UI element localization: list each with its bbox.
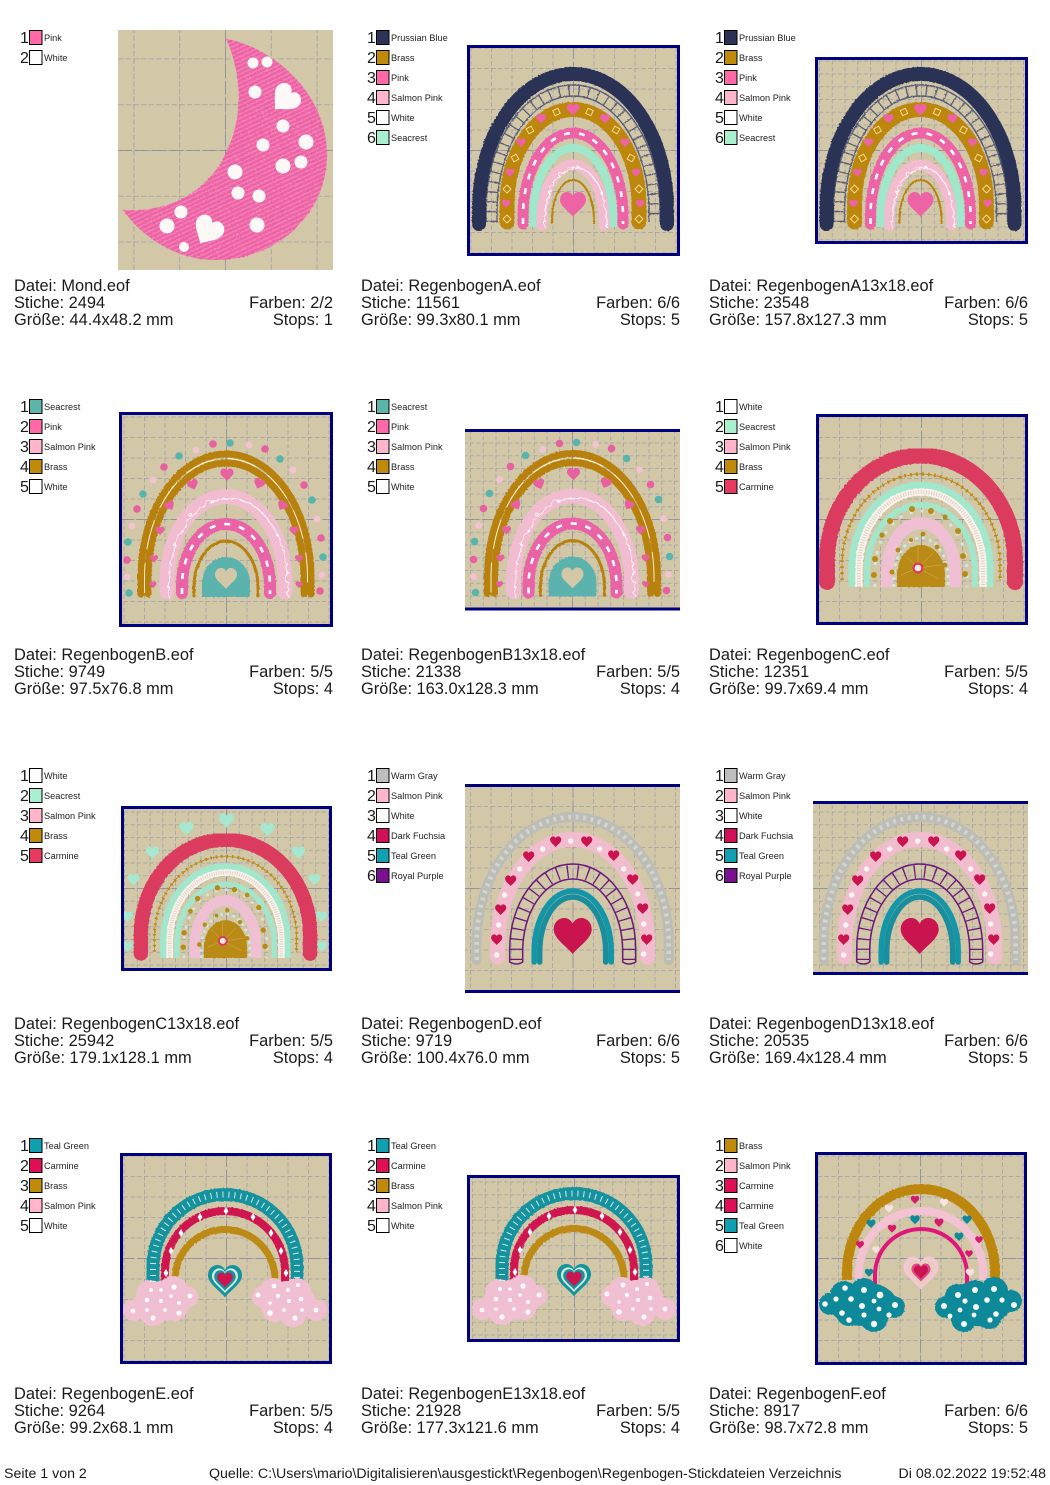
- legend: RegenbogenA colours: 3: [367, 70, 376, 87]
- legend: RegenbogenD13x18 colours: 1: [715, 768, 724, 785]
- legend: RegenbogenE13x18 colours: 5: [367, 1218, 376, 1235]
- legend: RegenbogenA13x18 colours: 6: [715, 130, 724, 147]
- file info: Mond: Größe: 44.4x48.2 mm: [14, 311, 173, 329]
- legend: RegenbogenE colours: 1: [20, 1138, 29, 1155]
- legend: RegenbogenA colours: 4: [367, 90, 376, 107]
- legend: RegenbogenC colours: 5: [715, 479, 724, 496]
- legend: RegenbogenD13x18 colours: Warm Gray: [739, 771, 786, 781]
- legend: RegenbogenA13x18 colours: 1: [715, 30, 724, 47]
- legend: RegenbogenA13x18 colours: Brass: [739, 53, 763, 63]
- legend: RegenbogenD colours: 4: [367, 828, 376, 845]
- legend: RegenbogenA colours: Seacrest: [391, 133, 428, 143]
- file info: RegenbogenB: Datei: RegenbogenB.eof: [14, 646, 194, 664]
- legend: RegenbogenB13x18 colours: [367, 399, 443, 496]
- embroidery preview: rainbow C 13x18: [121, 806, 332, 971]
- legend: RegenbogenD colours: White: [391, 811, 414, 821]
- legend: RegenbogenB13x18 colours: 1: [367, 399, 376, 416]
- file info: RegenbogenE13x18: Datei: RegenbogenE13x18.eof: [361, 1385, 586, 1403]
- embroidery preview: moon: [118, 30, 333, 270]
- file info: RegenbogenE: Stiche: 9264: [14, 1402, 105, 1420]
- panel: RegenbogenA13x18: [709, 30, 1028, 329]
- panel: Mond: [14, 30, 333, 329]
- legend: RegenbogenC13x18 colours: Salmon Pink: [44, 811, 96, 821]
- file info: RegenbogenD: Stops: 5: [620, 1049, 680, 1067]
- legend: RegenbogenD13x18 colours: 6: [715, 868, 724, 885]
- file info: RegenbogenA13x18: Größe: 157.8x127.3 mm: [709, 311, 887, 329]
- file info: RegenbogenA: Datei: RegenbogenA.eof: [361, 277, 541, 295]
- legend: RegenbogenE colours: Brass: [44, 1181, 68, 1191]
- legend: RegenbogenC colours: Salmon Pink: [739, 442, 791, 452]
- legend: RegenbogenD13x18 colours: Teal Green: [739, 851, 784, 861]
- file info: RegenbogenB13x18: Farben: 5/5: [596, 663, 680, 681]
- legend: RegenbogenE13x18 colours: Salmon Pink: [391, 1201, 443, 1211]
- legend: RegenbogenE13x18 colours: 4: [367, 1198, 376, 1215]
- legend: RegenbogenA13x18 colours: Seacrest: [739, 133, 776, 143]
- embroidery preview: rainbow D 13x18: [813, 801, 1028, 975]
- panel: RegenbogenB: [14, 399, 333, 698]
- embroidery preview: rainbow B: [119, 412, 333, 627]
- file info: Mond: [14, 277, 333, 329]
- legend: RegenbogenD colours: 5: [367, 848, 376, 865]
- legend: RegenbogenD colours: [367, 768, 446, 885]
- file info: Mond: Farben: 2/2: [249, 294, 333, 312]
- legend: RegenbogenE colours: Salmon Pink: [44, 1201, 96, 1211]
- file info: RegenbogenA13x18: [709, 277, 1028, 329]
- file info: RegenbogenC13x18: [14, 1015, 333, 1067]
- file info: Mond: Datei: Mond.eof: [14, 277, 130, 295]
- file info: RegenbogenA: Stiche: 11561: [361, 294, 460, 312]
- legend: RegenbogenB13x18 colours: 2: [367, 419, 376, 436]
- legend: RegenbogenE colours: Teal Green: [44, 1141, 89, 1151]
- panel: RegenbogenE13x18: [361, 1138, 680, 1437]
- legend: RegenbogenE13x18 colours: Carmine: [391, 1161, 426, 1171]
- panel: RegenbogenD: [361, 768, 680, 1067]
- legend: RegenbogenB colours: Salmon Pink: [44, 442, 96, 452]
- file info: RegenbogenB13x18: Größe: 163.0x128.3 mm: [361, 680, 539, 698]
- legend: RegenbogenE13x18 colours: 2: [367, 1158, 376, 1175]
- legend: RegenbogenB colours: White: [44, 482, 68, 492]
- legend: RegenbogenD colours: 1: [367, 768, 376, 785]
- legend: RegenbogenD13x18 colours: White: [739, 811, 762, 821]
- legend: RegenbogenE colours: White: [44, 1221, 68, 1231]
- legend: RegenbogenC13x18 colours: 1: [20, 768, 29, 785]
- legend: RegenbogenF colours: Carmine: [739, 1181, 774, 1191]
- legend: RegenbogenA13x18 colours: 5: [715, 110, 724, 127]
- file info: RegenbogenC13x18: Größe: 179.1x128.1 mm: [14, 1049, 192, 1067]
- legend: RegenbogenA13x18 colours: 2: [715, 50, 724, 67]
- file info: RegenbogenB: Größe: 97.5x76.8 mm: [14, 680, 173, 698]
- legend: RegenbogenB colours: 1: [20, 399, 29, 416]
- file info: Mond: Stiche: 2494: [14, 294, 105, 312]
- page footer: Seite 1 von 2: [4, 1466, 87, 1482]
- legend: RegenbogenF colours: Salmon Pink: [739, 1161, 791, 1171]
- legend: Mond colours: White: [44, 53, 68, 63]
- legend: RegenbogenB13x18 colours: White: [391, 482, 414, 492]
- legend: RegenbogenC13x18 colours: White: [44, 771, 68, 781]
- legend: RegenbogenB colours: Pink: [44, 422, 62, 432]
- legend: RegenbogenA colours: [367, 30, 448, 147]
- file info: RegenbogenF: Stops: 5: [968, 1419, 1028, 1437]
- legend: RegenbogenA colours: Salmon Pink: [391, 93, 443, 103]
- legend: RegenbogenE13x18 colours: Teal Green: [391, 1141, 436, 1151]
- legend: RegenbogenA colours: Pink: [391, 73, 409, 83]
- file info: RegenbogenD13x18: Farben: 6/6: [944, 1032, 1028, 1050]
- legend: RegenbogenD colours: 6: [367, 868, 376, 885]
- legend: RegenbogenA colours: Prussian Blue: [391, 33, 448, 43]
- legend: Mond colours: 2: [20, 50, 29, 67]
- legend: RegenbogenF colours: 2: [715, 1158, 724, 1175]
- embroidery preview: rainbow D: [465, 784, 680, 993]
- file info: RegenbogenA: Farben: 6/6: [596, 294, 680, 312]
- legend: RegenbogenE colours: Carmine: [44, 1161, 79, 1171]
- panel: RegenbogenC: [709, 399, 1028, 698]
- legend: RegenbogenF colours: Carmine: [739, 1201, 774, 1211]
- legend: RegenbogenA13x18 colours: 3: [715, 70, 724, 87]
- legend: RegenbogenD colours: Warm Gray: [391, 771, 438, 781]
- panel: RegenbogenE: [14, 1138, 333, 1437]
- legend: RegenbogenF colours: Teal Green: [739, 1221, 784, 1231]
- legend: RegenbogenC colours: [715, 399, 791, 496]
- legend: RegenbogenD colours: Teal Green: [391, 851, 436, 861]
- file info: RegenbogenC13x18: Datei: RegenbogenC13x18.eof: [14, 1015, 240, 1033]
- file info: RegenbogenF: Datei: RegenbogenF.eof: [709, 1385, 886, 1403]
- page footer: [4, 1466, 1046, 1482]
- legend: RegenbogenB13x18 colours: 4: [367, 459, 376, 476]
- legend: RegenbogenE13x18 colours: Brass: [391, 1181, 415, 1191]
- panel: RegenbogenB13x18: [361, 399, 680, 698]
- file info: RegenbogenD13x18: [709, 1015, 1028, 1067]
- file info: RegenbogenE13x18: Stiche: 21928: [361, 1402, 461, 1420]
- legend: RegenbogenC13x18 colours: 5: [20, 848, 29, 865]
- page footer: Quelle: C:\Users\mario\Digitalisieren\ausgestickt\Regenbogen\Regenbogen-Stickdateien Verzeichnis: [209, 1466, 841, 1482]
- panel: RegenbogenF: [709, 1138, 1028, 1437]
- file info: RegenbogenF: [709, 1385, 1028, 1437]
- file info: RegenbogenA: Stops: 5: [620, 311, 680, 329]
- file info: RegenbogenB13x18: Datei: RegenbogenB13x18.eof: [361, 646, 586, 664]
- legend: RegenbogenC colours: Seacrest: [739, 422, 776, 432]
- file info: RegenbogenA13x18: Stops: 5: [968, 311, 1028, 329]
- legend: RegenbogenF colours: 1: [715, 1138, 724, 1155]
- file info: RegenbogenD: [361, 1015, 680, 1067]
- file info: RegenbogenE13x18: [361, 1385, 680, 1437]
- file info: RegenbogenF: Stiche: 8917: [709, 1402, 800, 1420]
- legend: RegenbogenA13x18 colours: Prussian Blue: [739, 33, 796, 43]
- file info: RegenbogenD: Farben: 6/6: [596, 1032, 680, 1050]
- legend: RegenbogenB13x18 colours: Brass: [391, 462, 415, 472]
- legend: RegenbogenC13x18 colours: Brass: [44, 831, 68, 841]
- file info: RegenbogenF: Größe: 98.7x72.8 mm: [709, 1419, 868, 1437]
- legend: RegenbogenF colours: Brass: [739, 1141, 763, 1151]
- legend: RegenbogenA colours: 6: [367, 130, 376, 147]
- file info: RegenbogenC13x18: Farben: 5/5: [249, 1032, 333, 1050]
- legend: RegenbogenA13x18 colours: White: [739, 113, 762, 123]
- file info: RegenbogenC13x18: Stiche: 25942: [14, 1032, 114, 1050]
- file info: RegenbogenE13x18: Stops: 4: [620, 1419, 680, 1437]
- embroidery preview: rainbow B 13x18: [465, 429, 680, 610]
- file info: RegenbogenD13x18: Stiche: 20535: [709, 1032, 809, 1050]
- file info: RegenbogenC: [709, 646, 1028, 698]
- legend: RegenbogenF colours: [715, 1138, 791, 1255]
- legend: RegenbogenE13x18 colours: White: [391, 1221, 414, 1231]
- file info: RegenbogenC: Stiche: 12351: [709, 663, 809, 681]
- legend: RegenbogenB13x18 colours: Salmon Pink: [391, 442, 443, 452]
- legend: Mond colours: Pink: [44, 33, 62, 43]
- legend: RegenbogenE colours: 3: [20, 1178, 29, 1195]
- file info: RegenbogenD: Datei: RegenbogenD.eof: [361, 1015, 542, 1033]
- legend: RegenbogenD colours: 3: [367, 808, 376, 825]
- legend: RegenbogenA colours: 2: [367, 50, 376, 67]
- file info: RegenbogenB: Stiche: 9749: [14, 663, 105, 681]
- file info: RegenbogenD: Stiche: 9719: [361, 1032, 452, 1050]
- embroidery preview: rainbow E: [120, 1153, 332, 1364]
- legend: RegenbogenE colours: 2: [20, 1158, 29, 1175]
- legend: RegenbogenB colours: Seacrest: [44, 402, 81, 412]
- legend: RegenbogenE colours: [20, 1138, 96, 1235]
- file info: RegenbogenE13x18: Größe: 177.3x121.6 mm: [361, 1419, 539, 1437]
- page footer: Di 08.02.2022 19:52:48: [898, 1466, 1046, 1482]
- file info: RegenbogenD: Größe: 100.4x76.0 mm: [361, 1049, 530, 1067]
- legend: RegenbogenD13x18 colours: 5: [715, 848, 724, 865]
- file info: RegenbogenA: Größe: 99.3x80.1 mm: [361, 311, 520, 329]
- legend: RegenbogenC colours: Brass: [739, 462, 763, 472]
- legend: RegenbogenF colours: White: [739, 1241, 762, 1251]
- file info: RegenbogenE: Größe: 99.2x68.1 mm: [14, 1419, 173, 1437]
- legend: RegenbogenD13x18 colours: Dark Fuchsia: [739, 831, 794, 841]
- legend: RegenbogenE colours: 5: [20, 1218, 29, 1235]
- embroidery preview: rainbow F: [815, 1152, 1027, 1365]
- legend: RegenbogenE colours: 4: [20, 1198, 29, 1215]
- legend: RegenbogenC colours: 3: [715, 439, 724, 456]
- file info: RegenbogenE: [14, 1385, 333, 1437]
- panel: RegenbogenC13x18: [14, 768, 333, 1067]
- legend: RegenbogenC colours: White: [739, 402, 762, 412]
- panel: RegenbogenD13x18: [709, 768, 1028, 1067]
- file info: RegenbogenB13x18: [361, 646, 680, 698]
- legend: RegenbogenF colours: 6: [715, 1238, 724, 1255]
- file info: RegenbogenE: Farben: 5/5: [249, 1402, 333, 1420]
- file info: RegenbogenD13x18: Stops: 5: [968, 1049, 1028, 1067]
- legend: RegenbogenA colours: 5: [367, 110, 376, 127]
- legend: RegenbogenD13x18 colours: 2: [715, 788, 724, 805]
- legend: RegenbogenC13x18 colours: 3: [20, 808, 29, 825]
- panel: RegenbogenA: [361, 30, 680, 329]
- file info: RegenbogenC: Datei: RegenbogenC.eof: [709, 646, 890, 664]
- file info: RegenbogenA: [361, 277, 680, 329]
- legend: RegenbogenE13x18 colours: [367, 1138, 443, 1235]
- legend: RegenbogenD13x18 colours: [715, 768, 794, 885]
- file info: RegenbogenE13x18: Farben: 5/5: [596, 1402, 680, 1420]
- legend: RegenbogenB colours: 3: [20, 439, 29, 456]
- file info: RegenbogenC13x18: Stops: 4: [273, 1049, 333, 1067]
- legend: RegenbogenC colours: 2: [715, 419, 724, 436]
- legend: RegenbogenA colours: White: [391, 113, 414, 123]
- legend: RegenbogenC colours: 1: [715, 399, 724, 416]
- embroidery preview: rainbow E 13x18: [467, 1175, 680, 1342]
- legend: RegenbogenA13x18 colours: [715, 30, 796, 147]
- legend: RegenbogenC13x18 colours: 2: [20, 788, 29, 805]
- legend: RegenbogenB13x18 colours: Pink: [391, 422, 409, 432]
- file info: RegenbogenA13x18: Datei: RegenbogenA13x18.eof: [709, 277, 934, 295]
- legend: RegenbogenC colours: 4: [715, 459, 724, 476]
- legend: RegenbogenB13x18 colours: Seacrest: [391, 402, 428, 412]
- legend: RegenbogenC13x18 colours: 4: [20, 828, 29, 845]
- legend: RegenbogenD colours: 2: [367, 788, 376, 805]
- legend: RegenbogenD colours: Salmon Pink: [391, 791, 443, 801]
- legend: RegenbogenB colours: Brass: [44, 462, 68, 472]
- legend: RegenbogenE13x18 colours: 1: [367, 1138, 376, 1155]
- legend: RegenbogenA colours: 1: [367, 30, 376, 47]
- embroidery preview: rainbow A: [467, 45, 680, 256]
- legend: Mond colours: [20, 30, 68, 67]
- legend: RegenbogenB13x18 colours: 3: [367, 439, 376, 456]
- file info: RegenbogenA13x18: Stiche: 23548: [709, 294, 809, 312]
- legend: RegenbogenC colours: Carmine: [739, 482, 774, 492]
- legend: RegenbogenC13x18 colours: Carmine: [44, 851, 79, 861]
- legend: RegenbogenB colours: [20, 399, 96, 496]
- legend: RegenbogenD13x18 colours: Royal Purple: [739, 871, 792, 881]
- file info: RegenbogenF: Farben: 6/6: [944, 1402, 1028, 1420]
- legend: RegenbogenD13x18 colours: Salmon Pink: [739, 791, 791, 801]
- file info: RegenbogenC: Größe: 99.7x69.4 mm: [709, 680, 868, 698]
- file info: RegenbogenD13x18: Größe: 169.4x128.4 mm: [709, 1049, 887, 1067]
- legend: RegenbogenA13x18 colours: Salmon Pink: [739, 93, 791, 103]
- file info: RegenbogenB13x18: Stops: 4: [620, 680, 680, 698]
- legend: RegenbogenD13x18 colours: 3: [715, 808, 724, 825]
- file info: RegenbogenB: Farben: 5/5: [249, 663, 333, 681]
- legend: RegenbogenA13x18 colours: Pink: [739, 73, 757, 83]
- embroidery preview: rainbow A 13x18: [815, 57, 1028, 244]
- legend: RegenbogenF colours: 4: [715, 1198, 724, 1215]
- legend: RegenbogenE13x18 colours: 3: [367, 1178, 376, 1195]
- file info: RegenbogenB13x18: Stiche: 21338: [361, 663, 461, 681]
- legend: RegenbogenD13x18 colours: 4: [715, 828, 724, 845]
- legend: Mond colours: 1: [20, 30, 29, 47]
- file info: RegenbogenD13x18: Datei: RegenbogenD13x18.eof: [709, 1015, 935, 1033]
- legend: RegenbogenC13x18 colours: [20, 768, 96, 865]
- legend: RegenbogenB colours: 2: [20, 419, 29, 436]
- file info: RegenbogenE: Stops: 4: [273, 1419, 333, 1437]
- embroidery preview: rainbow C: [816, 414, 1028, 625]
- legend: RegenbogenD colours: Royal Purple: [391, 871, 444, 881]
- file info: RegenbogenB: [14, 646, 333, 698]
- file info: RegenbogenC: Stops: 4: [968, 680, 1028, 698]
- file info: RegenbogenE: Datei: RegenbogenE.eof: [14, 1385, 194, 1403]
- legend: RegenbogenF colours: 5: [715, 1218, 724, 1235]
- legend: RegenbogenB colours: 4: [20, 459, 29, 476]
- legend: RegenbogenB colours: 5: [20, 479, 29, 496]
- legend: RegenbogenC13x18 colours: Seacrest: [44, 791, 81, 801]
- legend: RegenbogenB13x18 colours: 5: [367, 479, 376, 496]
- legend: RegenbogenA13x18 colours: 4: [715, 90, 724, 107]
- file info: RegenbogenA13x18: Farben: 6/6: [944, 294, 1028, 312]
- legend: RegenbogenA colours: Brass: [391, 53, 415, 63]
- legend: RegenbogenD colours: Dark Fuchsia: [391, 831, 446, 841]
- file info: Mond: Stops: 1: [273, 311, 333, 329]
- file info: RegenbogenB: Stops: 4: [273, 680, 333, 698]
- file info: RegenbogenC: Farben: 5/5: [944, 663, 1028, 681]
- legend: RegenbogenF colours: 3: [715, 1178, 724, 1195]
